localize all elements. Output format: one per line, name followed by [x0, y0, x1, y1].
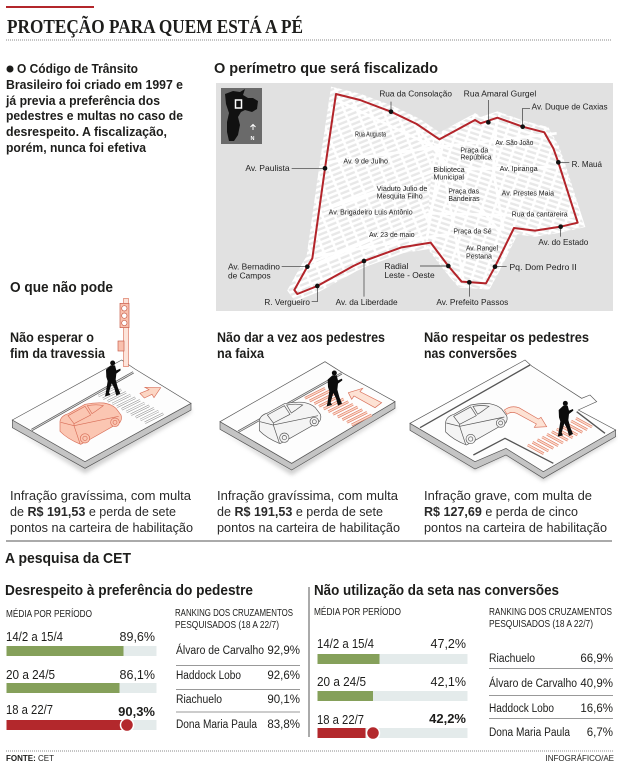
- bar chart: média por período: 18 a 22/7: [317, 713, 364, 727]
- bar chart: média por período: 86,1%: [120, 668, 155, 682]
- bar chart: média por período: 47,2%: [431, 637, 466, 651]
- scene headings: Não dar a vez aos pedestres: [217, 329, 385, 345]
- ranking table: 66,9%: [580, 653, 613, 665]
- street labels outside map: [228, 88, 608, 307]
- scene headings: fim da travessia: [10, 345, 105, 361]
- street labels inside map: Av. São João: [495, 138, 533, 147]
- ranking table: 92,9%: [267, 645, 300, 657]
- ranking table: [175, 608, 300, 731]
- ranking table: Riachuelo: [176, 694, 222, 706]
- scene descriptions: de R$ 191,53 e perda de sete: [217, 504, 383, 519]
- scene descriptions: pontos na carteira de habilitação: [217, 520, 400, 535]
- street labels outside map: R. Vergueiro: [264, 297, 310, 307]
- street labels outside map: Av. Paulista: [245, 163, 290, 173]
- bar chart: média por período: 42,1%: [431, 675, 466, 689]
- heading: o que não pode: O que não pode: [10, 280, 113, 296]
- panel: desrespeito à preferência do pedestre: [5, 583, 300, 732]
- ranking table: Dona Maria Paula: [176, 719, 258, 731]
- street labels inside map: Praça da Sé: [453, 226, 492, 235]
- street labels outside map: Leste - Oeste: [384, 270, 435, 280]
- ranking table: [489, 607, 613, 739]
- street labels inside map: Municipal: [433, 172, 464, 181]
- scene 2: car giving way: [220, 362, 395, 475]
- ranking table: RANKING DOS CRUZAMENTOS: [175, 608, 293, 619]
- top accent rule: [6, 6, 94, 8]
- panel heading: Não utilização da seta nas conversões: [314, 583, 559, 599]
- intro text: porém, nunca foi efetiva: [6, 141, 147, 155]
- bar chart: média por período: 42,2%: [429, 711, 466, 726]
- scene descriptions: Infração grave, com multa de: [424, 488, 592, 503]
- traffic light: [118, 298, 129, 367]
- bar chart: média por período: 89,6%: [120, 630, 155, 644]
- bar chart: média por período: 20 a 24/5: [6, 668, 55, 682]
- source credit: FONTE: CET: [6, 754, 54, 763]
- panel: não utilização da seta nas conversões: [314, 583, 613, 740]
- street labels inside map: Av. Prestes Maia: [502, 188, 555, 197]
- street labels inside map: Av. 9 de Julho: [343, 156, 388, 165]
- street labels outside map: Radial: [384, 261, 408, 271]
- ranking table: 6,7%: [587, 727, 613, 739]
- scene descriptions: Infração gravíssima, com multa: [217, 488, 399, 503]
- bar chart: média por período: [6, 607, 156, 732]
- ranking table: PESQUISADOS (18 A 22/7): [489, 619, 593, 630]
- ranking table: 92,6%: [267, 670, 300, 682]
- street labels inside map: República: [460, 153, 493, 162]
- scene headings: [10, 329, 589, 361]
- bar chart: média por período: MÉDIA POR PERÍODO: [6, 607, 92, 620]
- street labels outside map: Rua da Consolação: [379, 88, 452, 98]
- street labels outside map: Av. Duque de Caxias: [532, 102, 608, 112]
- street labels inside map: Av. Ipiranga: [500, 164, 539, 173]
- bar chart: média por período: 20 a 24/5: [317, 675, 366, 689]
- street labels outside map: Av. Bernadino: [228, 261, 280, 271]
- intro text: [5, 62, 183, 155]
- street labels outside map: Pq. Dom Pedro II: [509, 262, 577, 272]
- bar chart: média por período: 90,3%: [118, 704, 155, 719]
- scene descriptions: [10, 488, 607, 535]
- bar chart: média por período: 14/2 a 15/4: [6, 630, 63, 644]
- street labels inside map: [329, 130, 569, 260]
- street labels inside map: Biblioteca: [433, 165, 466, 174]
- street labels inside map: Rua da cantareira: [512, 209, 569, 218]
- street labels inside map: Av. Brigadeiro Luis Antônio: [329, 207, 413, 216]
- scene headings: Não esperar o: [10, 329, 94, 345]
- bar chart: média por período: [314, 605, 468, 740]
- ranking table: Haddock Lobo: [176, 670, 241, 682]
- street labels inside map: Mesquita Filho: [377, 191, 423, 200]
- ranking table: Dona Maria Paula: [489, 727, 571, 739]
- street labels outside map: de Campos: [228, 270, 271, 280]
- scene headings: nas conversões: [424, 345, 517, 361]
- bar chart: média por período: 18 a 22/7: [6, 703, 53, 717]
- map: streets and perimeter: [228, 88, 608, 307]
- street labels outside map: Av. Prefeito Passos: [436, 297, 509, 307]
- inset locator map: [221, 88, 262, 144]
- intro text: desrespeito. A fiscalização,: [6, 125, 167, 139]
- bar chart: média por período: MÉDIA POR PERÍODO: [314, 605, 401, 618]
- street labels inside map: Av. Rangel: [466, 244, 498, 253]
- ranking table: 83,8%: [267, 719, 300, 731]
- ranking table: Álvaro de Carvalho: [489, 677, 577, 690]
- scene descriptions: pontos na carteira de habilitação: [10, 520, 193, 535]
- street labels outside map: R. Mauá: [572, 159, 602, 169]
- bar chart: média por período: 14/2 a 15/4: [317, 637, 374, 651]
- scene descriptions: pontos na carteira de habilitação: [424, 520, 607, 535]
- graphic credit: INFOGRÁFICO/AE: [546, 754, 614, 763]
- ranking table: Riachuelo: [489, 653, 535, 665]
- street labels inside map: Praça da: [460, 145, 489, 154]
- ranking table: 16,6%: [580, 703, 613, 715]
- intro text: O Código de Trânsito: [17, 62, 138, 76]
- scene 3: turning car: [410, 360, 616, 481]
- ranking table: Haddock Lobo: [489, 703, 554, 715]
- street labels outside map: Av. do Estado: [538, 237, 588, 247]
- panel heading: Desrespeito à preferência do pedestre: [5, 583, 253, 599]
- street labels inside map: Pestana: [466, 251, 493, 260]
- street labels outside map: Av. da Liberdade: [336, 297, 398, 307]
- scene headings: Não respeitar os pedestres: [424, 329, 589, 345]
- street labels inside map: Bandeiras: [448, 194, 480, 203]
- street labels inside map: Praça das: [448, 186, 479, 195]
- intro text: Brasileiro foi criado em 1997 e: [6, 78, 183, 92]
- street labels inside map: Rua Augusta: [355, 130, 387, 139]
- intro text: já previa a preferência dos: [5, 94, 160, 108]
- title: PROTEÇÃO PARA QUEM ESTÁ A PÉ: [7, 16, 303, 38]
- street labels inside map: Av. 23 de maio: [369, 230, 415, 239]
- scene descriptions: R$ 127,69 e perda de cinco: [424, 504, 578, 519]
- inset locator map: N: [250, 136, 254, 142]
- ranking table: 40,9%: [580, 678, 613, 690]
- street labels outside map: Rua Amaral Gurgel: [464, 88, 536, 98]
- street labels inside map: Viaduto Julio de: [377, 184, 427, 193]
- scene descriptions: Infração gravíssima, com multa: [10, 488, 192, 503]
- ranking table: PESQUISADOS (18 A 22/7): [175, 620, 279, 631]
- scene 1: car and pedestrian at crossing: [12, 298, 191, 473]
- ranking table: 90,1%: [267, 694, 300, 706]
- panel: perimeter map: [216, 83, 613, 311]
- scene descriptions: de R$ 191,53 e perda de sete: [10, 504, 176, 519]
- heading: perimeter: O perímetro que será fiscalizado: [214, 61, 438, 77]
- heading: a pesquisa da CET: A pesquisa da CET: [5, 550, 131, 567]
- ranking table: Álvaro de Carvalho: [176, 644, 264, 657]
- scene headings: na faixa: [217, 345, 264, 361]
- intro text: pedestres e multas no caso de: [6, 109, 183, 123]
